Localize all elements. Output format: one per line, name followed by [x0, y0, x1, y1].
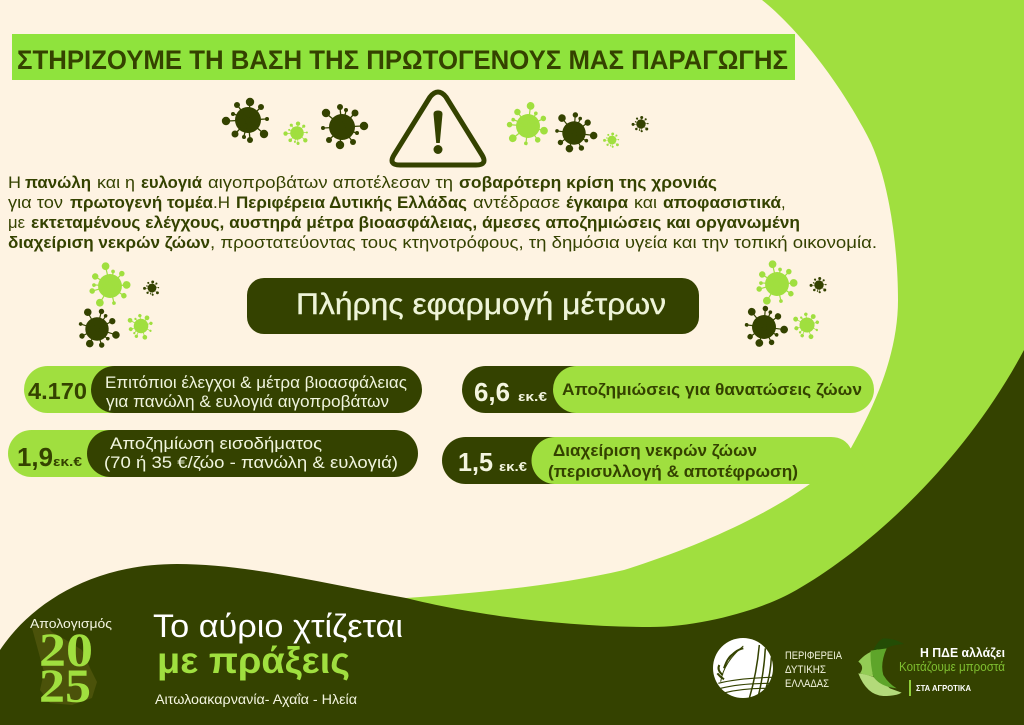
- stat pill: 6,6 million compensation: [462, 366, 874, 413]
- stat pill: 6,6 million compensation: 6,6: [474, 377, 510, 407]
- intro text block: έγκαιρα: [566, 194, 628, 212]
- stat pill: 1,9 million income compensation: (70 ή 35 €/ζώο - πανώλη & ευλογιά): [104, 453, 398, 472]
- heading pill: [247, 278, 699, 334]
- icon: warning triangle: [392, 92, 484, 165]
- intro text block: με: [8, 214, 26, 232]
- stat pill: 4.170 inspections: 4.170: [28, 378, 87, 404]
- stat pill: 4.170 inspections: Επιτόπιοι έλεγχοι & μέτρα βιοασφάλειας: [105, 374, 407, 392]
- title banner: ΣΤΗΡΙΖΟΥΜΕ ΤΗ ΒΑΣΗ ΤΗΣ ΠΡΩΤΟΓΕΝΟΥΣ ΜΑΣ ΠΑΡΑΓΩΓΗΣ: [17, 45, 788, 75]
- report badge: Απολογισμός 2025: [30, 617, 112, 713]
- stat pill: 1,5 million carcass management: 1,5: [458, 447, 493, 477]
- logo: Η ΠΔΕ αλλάζει: ΣΤΑ ΑΓΡΟΤΙΚΑ: [916, 683, 971, 693]
- report badge: Απολογισμός 2025: 25: [39, 660, 91, 713]
- intro text block: και: [634, 194, 657, 212]
- title banner: [12, 34, 795, 80]
- logo: Περιφέρεια Δυτικής Ελλάδας: ΔΥΤΙΚΗΣ: [785, 664, 826, 676]
- stat pill: 1,9 million income compensation: εκ.€: [53, 454, 82, 469]
- intro text block: [8, 174, 877, 252]
- logo: Περιφέρεια Δυτικής Ελλάδας: ΠΕΡΙΦΕΡΕΙΑ: [785, 650, 843, 662]
- intro text block: Περιφέρεια Δυτικής Ελλάδας: [236, 194, 467, 212]
- intro text block: διαχείριση νεκρών ζώων: [8, 234, 210, 252]
- slogan: Το αύριο χτίζεται: [153, 608, 403, 644]
- stat pill: 4.170 inspections: [24, 366, 422, 413]
- stat pill: 1,5 million carcass management: (περισυλλογή & αποτέφρωση): [548, 462, 798, 481]
- intro text block: πανώλη: [25, 174, 91, 192]
- intro text block: , προστατεύοντας τους κτηνοτρόφους, τη δημόσια υγεία και την τοπική οικονομία.: [210, 234, 877, 252]
- stat pill: 1,5 million carcass management: εκ.€: [499, 459, 527, 474]
- logo: Η ΠΔΕ αλλάζει: Η ΠΔΕ αλλάζει: [920, 646, 1006, 660]
- logo: Περιφέρεια Δυτικής Ελλάδας: [713, 638, 843, 698]
- virus icons: left cluster: [72, 259, 159, 356]
- slogan: Αιτωλοακαρνανία- Αχαΐα - Ηλεία: [155, 691, 357, 707]
- stat pill: 4.170 inspections: για πανώλη & ευλογιά αιγοπροβάτων: [106, 393, 389, 411]
- green swoosh: [406, 0, 1024, 660]
- intro text block: εκτεταμένους ελέγχους, αυστηρά μέτρα βιοασφάλειας, άμεσες αποζημιώσεις και οργανωμένη: [31, 214, 800, 232]
- report badge: Απολογισμός 2025: 20: [39, 624, 93, 677]
- stat pill: 6,6 million compensation: εκ.€: [518, 389, 547, 404]
- stat pill: 1,5 million carcass management: [442, 437, 866, 484]
- logo: Η ΠΔΕ αλλάζει: Κοιτάζουμε μπροστά: [899, 660, 1005, 674]
- stat pill: 1,9 million income compensation: 1,9: [17, 442, 53, 472]
- intro text block: ευλογιά: [141, 174, 202, 192]
- dark footer wave: [0, 350, 1024, 725]
- stat pill: 1,9 million income compensation: [8, 430, 418, 477]
- intro text block: για τον: [8, 194, 63, 212]
- intro text block: Η: [8, 174, 21, 192]
- virus icons: top row: [222, 98, 649, 157]
- intro text block: αντέδρασε: [473, 194, 561, 212]
- intro text block: σοβαρότερη κρίση της χρονιάς: [459, 174, 717, 192]
- stat pill: 6,6 million compensation: Αποζημιώσεις για θανατώσεις ζώων: [562, 380, 862, 399]
- intro text block: και η: [97, 174, 135, 192]
- slogan: [153, 608, 403, 707]
- intro text block: αποφασιστικά: [663, 194, 781, 212]
- intro text block: .Η: [213, 194, 230, 212]
- intro text block: ,: [781, 194, 786, 212]
- stat pill: 1,5 million carcass management: Διαχείριση νεκρών ζώων: [553, 441, 757, 460]
- virus icons: right cluster: [741, 257, 827, 351]
- heading pill: Πλήρης εφαρμογή μέτρων: [296, 288, 666, 321]
- intro text block: πρωτογενή τομέα: [70, 194, 213, 212]
- report badge: Απολογισμός 2025: Απολογισμός: [30, 617, 112, 631]
- logo: Η ΠΔΕ αλλάζει: [858, 638, 1006, 696]
- logo: Περιφέρεια Δυτικής Ελλάδας: ΕΛΛΑΔΑΣ: [785, 678, 829, 690]
- intro text block: αιγοπροβάτων αποτέλεσαν τη: [208, 174, 453, 192]
- slogan: με πράξεις: [157, 640, 350, 681]
- stat pill: 1,9 million income compensation: Αποζημίωση εισοδήματος: [110, 434, 322, 453]
